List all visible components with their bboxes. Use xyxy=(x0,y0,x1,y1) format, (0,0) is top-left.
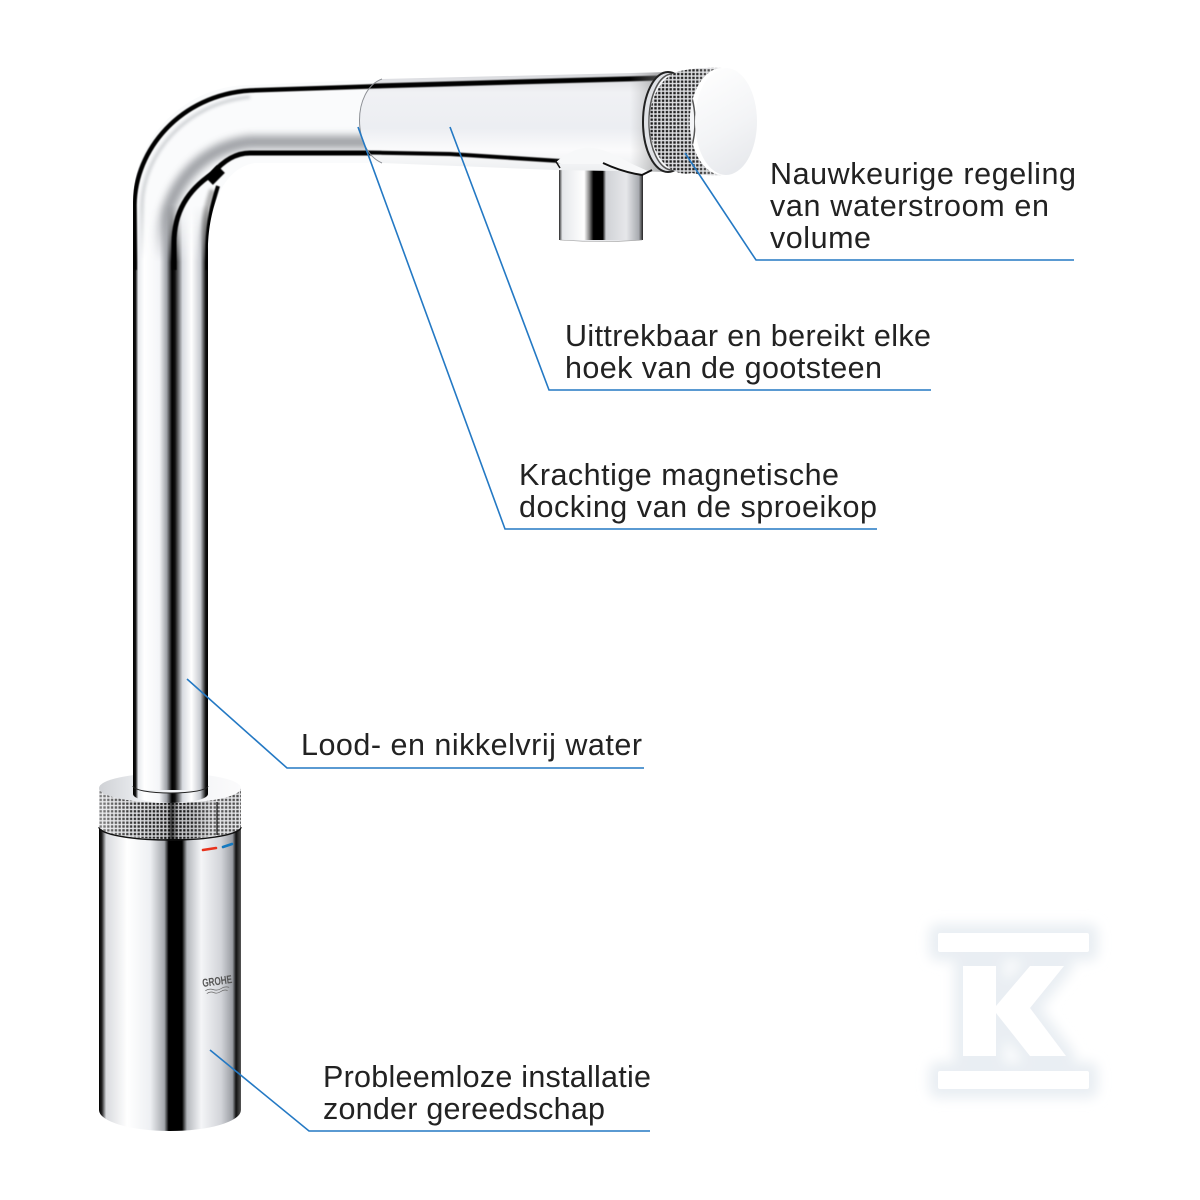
callout: lead and nickel free: Lood- en nikkelvrij water xyxy=(301,728,642,762)
faucet base cylinder xyxy=(99,826,241,1131)
callout: pull-out: Uittrekbaar en bereikt elke xyxy=(565,319,931,353)
callout: magnetic docking xyxy=(358,127,877,529)
vertical pipe and bend xyxy=(133,80,390,810)
brand logo: GROHE xyxy=(202,974,233,990)
callout: installation: Probleemloze installatie xyxy=(323,1060,651,1094)
brand logo xyxy=(202,974,234,995)
callout: installation xyxy=(210,1050,651,1131)
knurled base ring xyxy=(99,788,241,839)
spout junction xyxy=(555,148,652,175)
watermark logo xyxy=(938,933,1089,1089)
pull-out spray head xyxy=(360,72,663,172)
callout: water flow control: Nauwkeurige regeling xyxy=(770,157,1076,191)
hot and cold markers xyxy=(203,844,232,850)
spout outlet xyxy=(559,160,643,242)
callout: installation: zonder gereedschap xyxy=(323,1092,605,1126)
callout: pull-out: hoek van de gootsteen xyxy=(565,351,882,385)
callout: pull-out xyxy=(450,127,931,390)
callout: water flow control: van waterstroom en xyxy=(770,189,1049,223)
callout: water flow control: volume xyxy=(770,221,871,255)
callout: water flow control xyxy=(685,153,1076,260)
callout: magnetic docking: docking van de sproeikop xyxy=(519,490,877,524)
head seam xyxy=(360,79,382,163)
adjustment knob collar xyxy=(643,72,695,172)
pipe collar xyxy=(133,786,208,803)
callout: lead and nickel free xyxy=(187,679,644,768)
knurled control knob xyxy=(650,68,722,175)
base top cap xyxy=(99,773,241,803)
faucet illustration xyxy=(99,68,757,1131)
callout: magnetic docking: Krachtige magnetische xyxy=(519,458,839,492)
knob face xyxy=(695,68,757,175)
